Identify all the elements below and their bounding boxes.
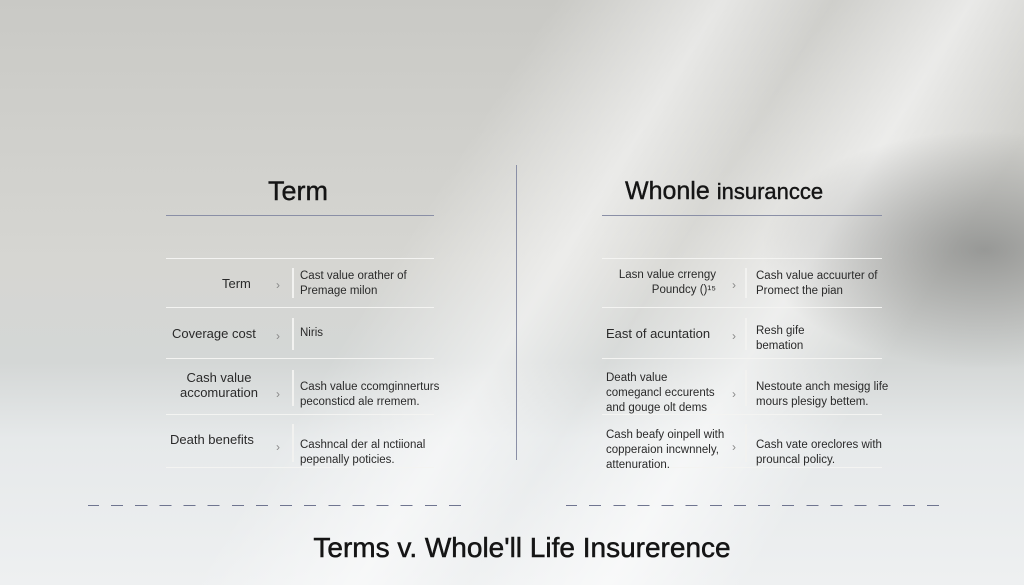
panel: term table: peconsticd ale rremem. bbox=[300, 396, 420, 408]
panel: term table: Cash value accomuration bbox=[180, 370, 258, 400]
panel: whole table: Poundcy ()¹⁵ bbox=[652, 284, 716, 296]
panel: term table: pepenally poticies. bbox=[300, 454, 395, 466]
panel: whole table: Cash beafy oinpell with bbox=[606, 429, 724, 441]
panel: whole table: › bbox=[732, 329, 736, 343]
panel: whole table: mours plesigy bettem. bbox=[756, 396, 868, 408]
panel: whole table: bemation bbox=[756, 340, 803, 352]
center divider bbox=[516, 165, 517, 460]
panel: whole table: copperaion incwnnely, bbox=[606, 444, 719, 456]
panel: term table: › bbox=[276, 440, 280, 454]
panel: whole table: prouncal policy. bbox=[756, 454, 835, 466]
panel: whole table: Cash vate oreclores with bbox=[756, 439, 882, 451]
panel: whole table: East of acuntation bbox=[606, 326, 710, 341]
panel: term table: Cast value orather of bbox=[300, 270, 407, 282]
panel: term table: Cash value ccomginnerturs bbox=[300, 381, 439, 393]
panel: term table: Niris bbox=[300, 327, 323, 339]
heading: Term: Term bbox=[268, 176, 328, 206]
panel: whole table: › bbox=[732, 387, 736, 401]
panel: term table: › bbox=[276, 387, 280, 401]
panel: whole table: and gouge olt dems bbox=[606, 402, 707, 414]
panel: term table: Death benefits bbox=[170, 432, 254, 447]
panel: whole table bbox=[602, 258, 888, 471]
panel: whole table: Lasn value crrengy bbox=[619, 269, 716, 281]
panel: whole table: Promect the pian bbox=[756, 285, 843, 297]
panel: whole table: Resh gife bbox=[756, 325, 805, 337]
panel: term table: › bbox=[276, 329, 280, 343]
panel: term table bbox=[166, 258, 439, 468]
panel: whole table: attenuration. bbox=[606, 459, 670, 471]
heading: Whole insurance: Whonle insurancce bbox=[625, 177, 823, 205]
title: Terms v. Whole'll Life Insurerence bbox=[313, 532, 731, 563]
panel: whole table: comegancl eccurents bbox=[606, 387, 715, 399]
panel: whole table: › bbox=[732, 278, 736, 292]
panel: term table: Coverage cost bbox=[172, 326, 256, 341]
panel: term table: Premage milon bbox=[300, 285, 377, 297]
panel: whole table: Death value bbox=[606, 372, 667, 384]
dashed dividers bbox=[88, 505, 470, 506]
panel: whole table: Nestoute anch mesigg life bbox=[756, 381, 888, 393]
panel: whole table: Cash value accuurter of bbox=[756, 270, 877, 282]
panel: term table: › bbox=[276, 278, 280, 292]
panel: term table: Term bbox=[222, 276, 251, 291]
panel: term table: Cashncal der al nctiional bbox=[300, 439, 425, 451]
panel: whole table: › bbox=[732, 440, 736, 454]
